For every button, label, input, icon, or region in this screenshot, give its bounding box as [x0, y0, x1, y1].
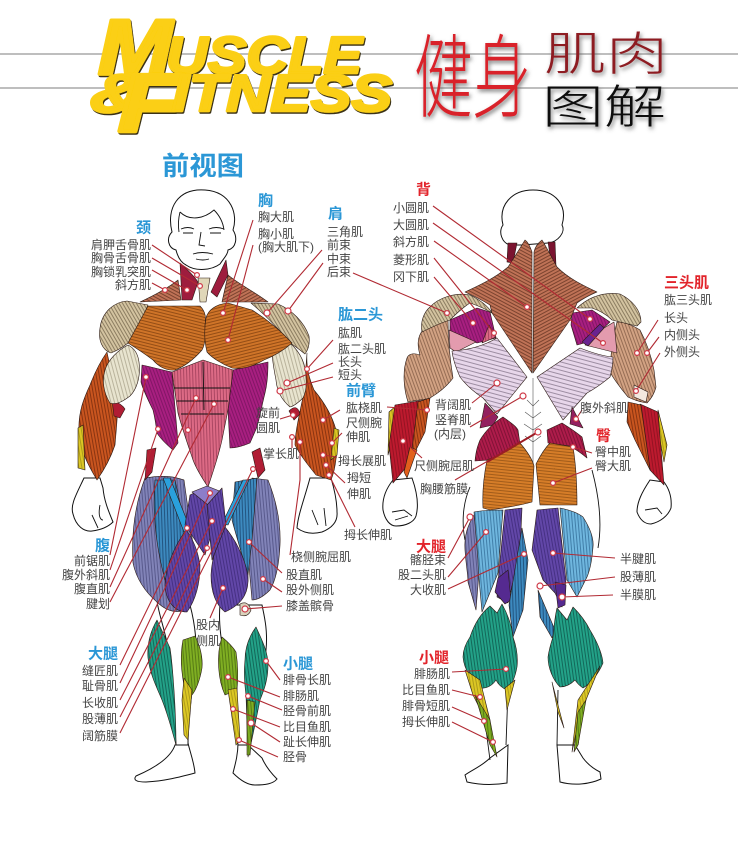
labels: front thigh left	[82, 644, 118, 743]
labels: rear calf: 拇长伸肌	[402, 715, 450, 729]
latissimus / serratus	[141, 362, 268, 450]
labels: mid back: (内层)	[434, 427, 466, 441]
labels: front thigh right: 膝盖髌骨	[286, 598, 334, 613]
labels: triceps	[664, 274, 712, 359]
labels: triceps: 内侧头	[664, 328, 700, 342]
labels: shoulder: 前束	[327, 237, 351, 252]
latissimus dorsi	[452, 338, 613, 420]
labels: biceps: 短头	[338, 368, 362, 382]
labels: mid back: 尺侧腕屈肌	[414, 458, 474, 473]
title: 健身肌肉图解: 图解	[542, 82, 666, 133]
labels: triceps: 长头	[664, 311, 688, 325]
labels: front thigh left: 耻骨肌	[82, 679, 118, 693]
labels: rear thigh left: 股二头肌	[398, 568, 446, 582]
labels: front calf: 腓肠肌	[283, 688, 319, 703]
labels: forearm	[256, 382, 392, 564]
labels: triceps: 三头肌	[664, 274, 709, 292]
labels: rear thigh left: 髂胫束	[410, 552, 446, 567]
lower legs	[148, 620, 268, 757]
labels: biceps: 肱肌	[338, 325, 362, 340]
labels: rear thigh left: 大腿	[416, 538, 446, 556]
labels: rear thigh right: 半腱肌	[620, 552, 656, 566]
obliques rear	[480, 403, 583, 428]
labels: rear calf: 比目鱼肌	[402, 683, 450, 697]
labels: mid back: 背阔肌	[435, 398, 471, 412]
labels: front thigh right: 股直肌	[286, 568, 322, 582]
rotator cuff: infraspinatus, teres	[449, 308, 617, 353]
labels: rear thigh right: 股薄肌	[620, 569, 656, 584]
hamstrings	[465, 508, 593, 638]
labels: chest: 胸大肌	[258, 209, 294, 224]
labels: front thigh right	[196, 568, 334, 648]
front hands	[72, 478, 337, 533]
logo: Muscle & Fitness: ITNESS	[172, 65, 392, 123]
figure: back view body	[383, 190, 671, 784]
triceps	[404, 320, 656, 403]
labels: rear thigh right	[620, 552, 656, 602]
labels: front thigh right: 侧肌	[196, 634, 220, 648]
labels: neck	[91, 220, 151, 292]
title: 健身肌肉图解	[414, 29, 668, 133]
thighs	[133, 448, 280, 612]
gluteus maximus	[483, 443, 577, 510]
labels: chest: 胸	[258, 192, 273, 210]
labels: rear thigh left	[398, 538, 446, 597]
labels: forearm: 拇长展肌	[338, 454, 386, 468]
labels: front thigh right: 股内	[196, 618, 220, 632]
labels: neck: 斜方肌	[115, 277, 151, 292]
labels: forearm: 伸肌	[346, 430, 370, 444]
labels: back	[393, 180, 431, 284]
labels: abdomen: 腹直肌	[74, 582, 110, 596]
front shin and knee outlines	[157, 600, 267, 745]
labels: forearm: 尺侧腕	[346, 415, 382, 430]
trapezius back	[465, 240, 597, 373]
forearms	[78, 352, 339, 480]
labels: front thigh left: 股薄肌	[82, 711, 118, 726]
trapezius front	[140, 275, 268, 302]
labels: back: 大圆肌	[393, 218, 429, 232]
labels: gluteus: 臀大肌	[595, 459, 631, 473]
labels: abdomen: 腹外斜肌	[62, 568, 110, 582]
back limb outlines	[463, 470, 600, 760]
labels: triceps: 外侧头	[664, 345, 700, 359]
labels: front thigh left: 长收肌	[82, 696, 118, 710]
logo: Muscle & Fitness: F	[118, 58, 184, 149]
labels: front thigh right: 股外侧肌	[286, 583, 334, 597]
back head	[501, 190, 563, 245]
labels: abdomen: 腱划	[86, 597, 110, 611]
labels: front thigh left: 阔筋膜	[82, 728, 118, 743]
labels: neck: 胸锁乳突肌	[91, 264, 151, 279]
labels: chest: 胸小肌	[258, 226, 294, 241]
labels: neck: 胸骨舌骨肌	[91, 250, 151, 265]
labels: forearm: 伸肌	[347, 487, 371, 501]
labels: shoulder: 肩	[328, 204, 343, 222]
kneecap	[240, 603, 251, 616]
labels: rear calf: 腓骨短肌	[402, 698, 450, 713]
labels: rear calf: 腓肠肌	[414, 666, 450, 681]
labels: back: 斜方肌	[393, 234, 429, 249]
labels: shoulder: 中束	[327, 251, 351, 266]
labels: mid back: 胸腰筋膜	[420, 481, 468, 496]
labels: gluteus: 臀	[596, 428, 611, 444]
labels: front thigh left: 缝匠肌	[82, 663, 118, 678]
labels: back: 背	[416, 180, 431, 198]
labels: shoulder	[327, 204, 363, 279]
labels: chest	[258, 192, 314, 254]
title: 健身肌肉图解: 肌肉	[544, 29, 668, 80]
logo: Muscle & Fitness: M	[98, 3, 174, 91]
labels: front calf: 胫骨前肌	[283, 703, 331, 718]
back forearms	[388, 398, 667, 485]
pectorals	[128, 303, 292, 370]
labels: forearm: 肱桡肌	[346, 400, 382, 415]
labels: rear calf	[402, 650, 450, 729]
labels: front calf: 趾长伸肌	[283, 735, 331, 749]
gastrocnemius	[463, 604, 603, 690]
labels: forearm: 圆肌	[256, 421, 280, 435]
logo: Muscle & Fitness	[90, 3, 392, 149]
lumbar spine detail	[524, 378, 542, 465]
labels: biceps: 长头	[338, 355, 362, 369]
leader lines and markers: back	[387, 206, 660, 744]
labels: biceps: 肱二头	[338, 306, 383, 324]
neck muscles	[180, 260, 228, 302]
labels: mid back: 腹外斜肌	[580, 401, 628, 415]
labels: abdomen: 腹	[95, 538, 110, 554]
labels: abdomen: 前锯肌	[74, 553, 110, 568]
labels: chest: (胸大肌下)	[258, 239, 314, 254]
gluteus medius	[475, 417, 587, 461]
labels: gluteus: 臀中肌	[595, 444, 631, 459]
labels: mid back	[414, 398, 628, 496]
labels: front calf: 比目鱼肌	[283, 720, 331, 734]
labels: front calf: 小腿	[283, 656, 313, 672]
labels: rear calf: 小腿	[419, 650, 449, 666]
labels: back: 小圆肌	[393, 201, 429, 215]
labels: gluteus	[595, 428, 631, 473]
labels: neck: 颈	[136, 220, 151, 236]
labels: shoulder: 三角肌	[327, 225, 363, 239]
back feet	[465, 745, 601, 784]
labels: front calf	[283, 656, 331, 764]
soleus and achilles	[465, 666, 600, 757]
logo: Muscle & Fitness: USCLE	[166, 27, 363, 85]
title: 健身肌肉图解: 健身	[414, 29, 531, 130]
back hands	[383, 478, 671, 526]
labels: rear thigh right: 半膜肌	[620, 588, 656, 602]
labels: rear thigh left: 大收肌	[410, 583, 446, 597]
labels: biceps: 肱二头肌	[338, 341, 386, 356]
labels: neck: 肩胛舌骨肌	[91, 237, 151, 252]
labels: abdomen	[62, 538, 110, 611]
heading: front view: 前视图	[162, 151, 244, 181]
abdominals	[172, 360, 233, 487]
labels: forearm: 拇长伸肌	[344, 528, 392, 542]
head	[169, 190, 236, 269]
labels: forearm: 掌长肌	[263, 447, 299, 461]
labels: forearm: 旋前	[256, 405, 280, 420]
deltoids rear	[421, 294, 641, 332]
neck deep muscles	[507, 242, 556, 266]
labels: back: 菱形肌	[393, 253, 429, 267]
deltoids	[99, 301, 309, 354]
labels: forearm: 前臂	[346, 382, 376, 400]
biceps	[103, 343, 306, 407]
front feet	[135, 743, 277, 785]
logo: Muscle & Fitness: &	[90, 64, 144, 124]
labels: forearm: 桡侧腕屈肌	[291, 549, 351, 564]
labels: front calf: 胫骨	[283, 750, 307, 764]
labels: biceps	[338, 306, 386, 382]
labels: front thigh left: 大腿	[88, 644, 118, 662]
labels: triceps: 肱三头肌	[664, 292, 712, 307]
labels: front calf: 腓骨长肌	[283, 672, 331, 687]
labels: back: 冈下肌	[393, 270, 429, 284]
header rule lines	[0, 54, 738, 88]
figure: front view body	[72, 190, 339, 785]
labels: shoulder: 后束	[327, 265, 351, 279]
leader lines and markers: front	[110, 220, 447, 757]
labels: mid back: 竖脊肌	[435, 413, 471, 427]
labels: forearm: 拇短	[347, 471, 371, 485]
